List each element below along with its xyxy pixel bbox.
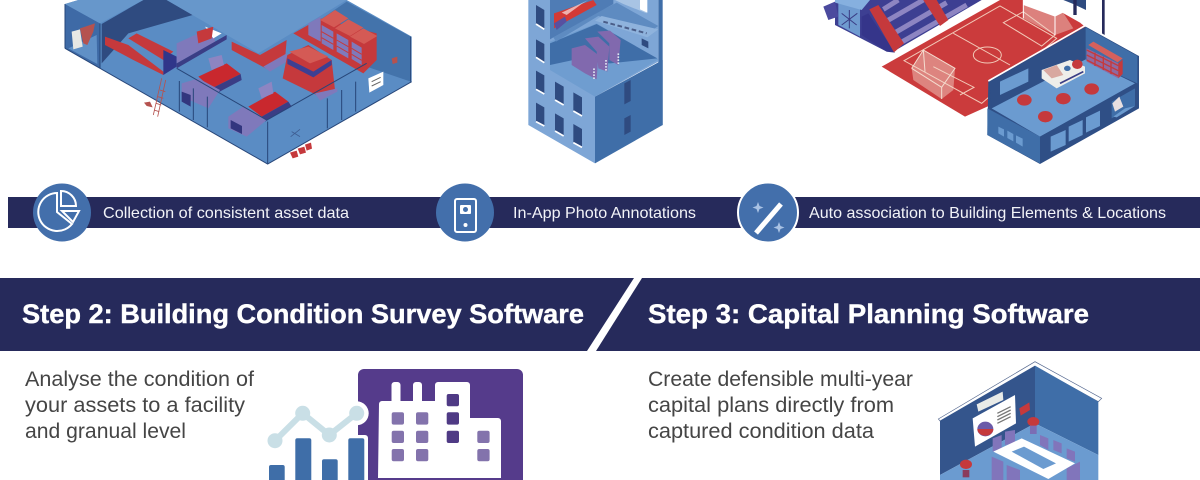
icon: phone camera in circle [436, 184, 494, 242]
icon: magic wand in circle [738, 182, 798, 242]
text: step 3 description [648, 367, 913, 443]
heading: step 2: Step 2: Building Condition Survey Software [22, 299, 584, 329]
text: step 3 description: captured condition data [648, 419, 874, 443]
text: photo annotations: In-App Photo Annotations [513, 205, 696, 222]
text: step 2 description [25, 367, 254, 443]
text: step 2 description: Analyse the condition of [25, 367, 254, 391]
text: step 2 description: your assets to a facility [25, 393, 245, 417]
illustration: isometric meeting room [938, 362, 1102, 480]
text: step 2 description: and granual level [25, 419, 186, 443]
text: step 3 description: Create defensible multi-year [648, 367, 913, 391]
step header banner [0, 278, 1200, 351]
illustration: isometric warehouse [65, 0, 412, 164]
text: step 3 description: capital plans directly from [648, 393, 894, 417]
icon: pie chart in circle [33, 184, 91, 242]
feature band [8, 182, 1200, 242]
illustration: stadium with pitch and cafe [823, 0, 1139, 164]
text: auto association: Auto association to Building Elements & Locations [809, 205, 1166, 222]
illustration: cutaway multi-storey building [528, 0, 663, 163]
heading: step 3: Step 3: Capital Planning Software [648, 299, 1089, 329]
icon: factory building with chart [268, 369, 523, 480]
text: consistent asset data: Collection of consistent asset data [103, 205, 349, 222]
